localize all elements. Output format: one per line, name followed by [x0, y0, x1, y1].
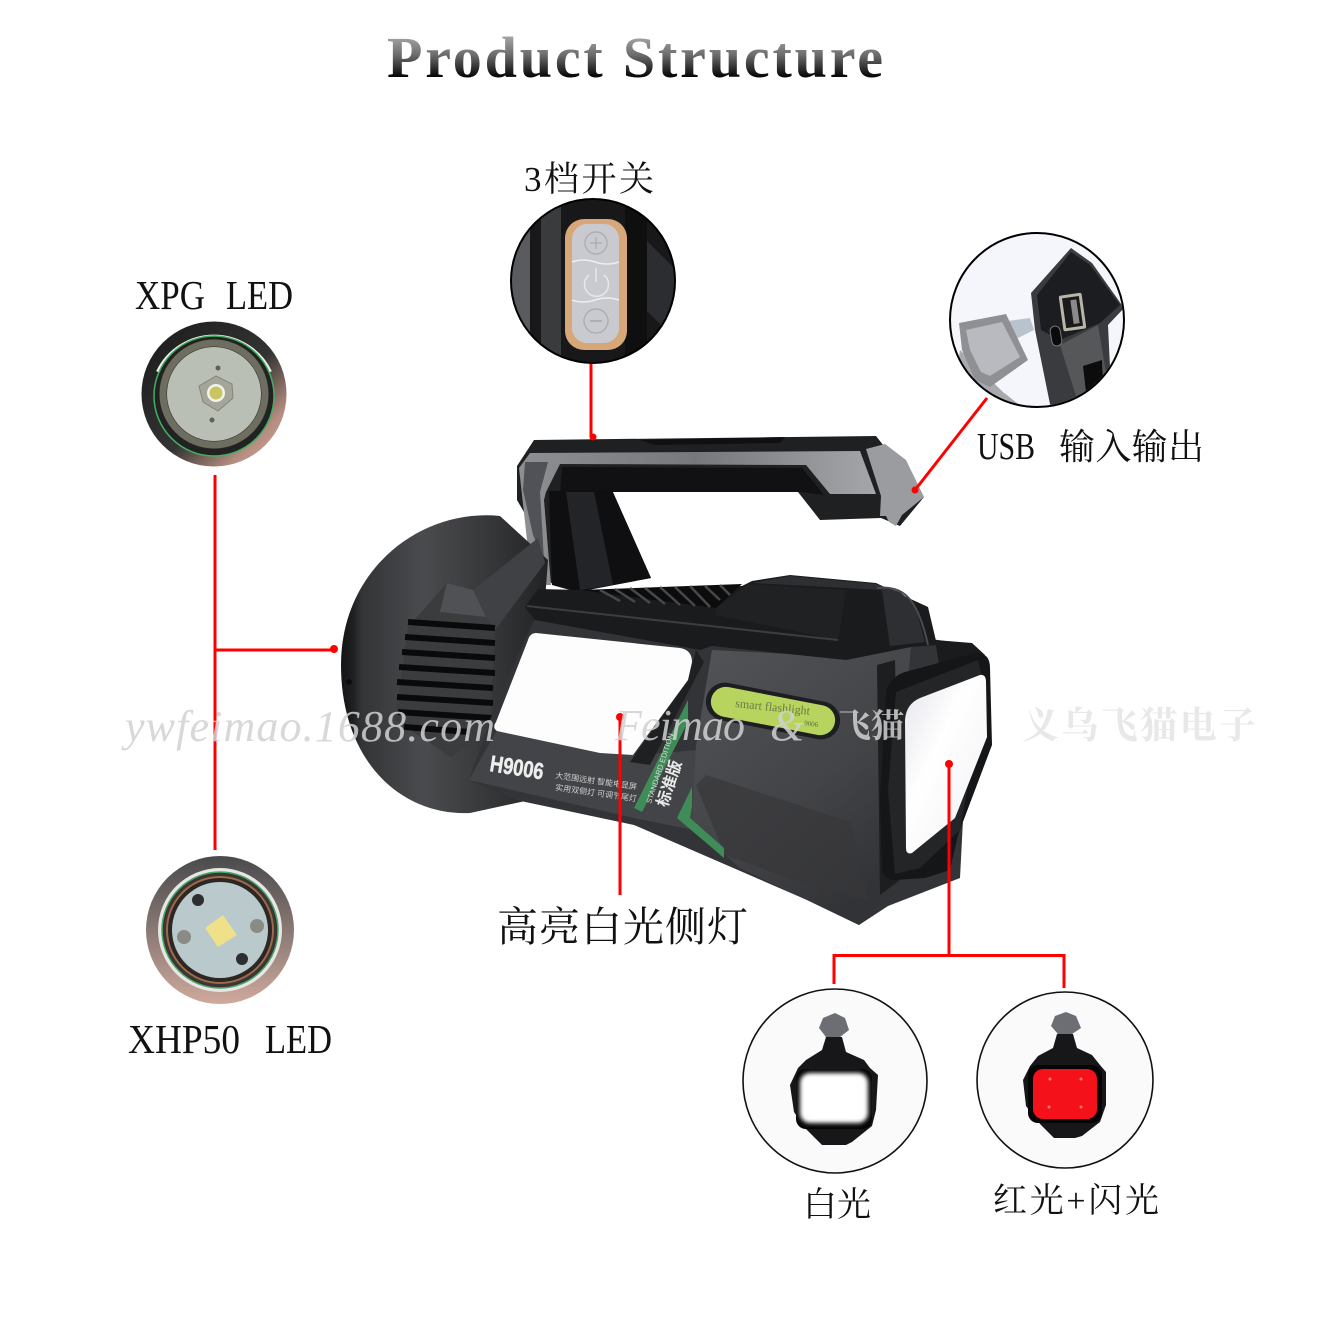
- circle: 3-mode switch: [510, 198, 676, 364]
- side light panel: [494, 633, 692, 755]
- circle: USB ports: [950, 233, 1125, 410]
- model text: 实用双侧灯 可调节尾灯: [555, 782, 638, 803]
- heat sink vents: [395, 538, 545, 757]
- red leader: switch: [590, 363, 596, 440]
- watermark text: [121, 701, 1256, 751]
- label: USB: [977, 426, 1204, 468]
- red leader: USB: [912, 398, 987, 494]
- circle: XPG LED: [142, 322, 286, 466]
- flap strap and stem: [1009, 318, 1034, 338]
- label: side light: 高亮白光侧灯: [497, 904, 748, 950]
- side rim stripe: [877, 660, 900, 895]
- red leader: end light: [834, 760, 1064, 988]
- label: USB: USB: [977, 426, 1035, 468]
- main body: [469, 590, 972, 925]
- rubber flap: [959, 314, 1028, 387]
- label: white light: 白光: [803, 1186, 871, 1224]
- lamp head: [341, 515, 548, 813]
- watermark text: ywfeimao.1688.com: [121, 702, 495, 751]
- label: USB: 输入输出: [1059, 427, 1204, 467]
- handle: [517, 436, 924, 592]
- model text: [488, 732, 686, 809]
- usb port: [1059, 293, 1086, 331]
- circle: white light mode: [743, 989, 927, 1173]
- label: XHP50 LED: XHP50: [128, 1016, 240, 1062]
- watermark text: 飞猫: [838, 708, 904, 745]
- type-c port: [1049, 325, 1063, 347]
- flashlight main product: [341, 436, 992, 925]
- model text: 标准版: [654, 758, 686, 809]
- side light panel frame: [630, 650, 704, 765]
- circle: XHP50 LED: [146, 856, 294, 1004]
- red leader: LED head: [215, 475, 338, 850]
- end light lens: [880, 640, 992, 880]
- green label: smart flashlight: [735, 696, 811, 718]
- title: Product Structure: [387, 25, 883, 90]
- label: red and flash: 红光+闪光: [993, 1182, 1159, 1220]
- handle end body: [1031, 248, 1124, 409]
- watermark text: Feimao: [614, 701, 745, 750]
- label: XHP50 LED: [128, 1016, 332, 1062]
- watermark text: &: [770, 701, 805, 750]
- label: XPG LED: LED: [226, 272, 293, 318]
- model text: H9006: [488, 750, 546, 784]
- green stripes: [634, 700, 688, 812]
- circle: red light mode: [977, 992, 1153, 1168]
- green label: 9006: [804, 719, 819, 729]
- red leader: side light: [616, 713, 624, 895]
- model text: 大范围远射 智能电显屏: [555, 770, 638, 791]
- label: XPG LED: XPG: [135, 272, 205, 318]
- label: switch: 3档开关: [524, 160, 654, 199]
- label: XPG LED: [135, 272, 293, 318]
- switch buttons: [565, 219, 627, 350]
- green label: [703, 679, 843, 743]
- top rail and grille: [525, 575, 937, 660]
- model text: STANDARD EDITION: [644, 732, 676, 805]
- label: XHP50 LED: LED: [265, 1016, 332, 1062]
- watermark text: 义乌飞猫电子: [1022, 705, 1256, 747]
- USB rubber cap: [866, 444, 924, 526]
